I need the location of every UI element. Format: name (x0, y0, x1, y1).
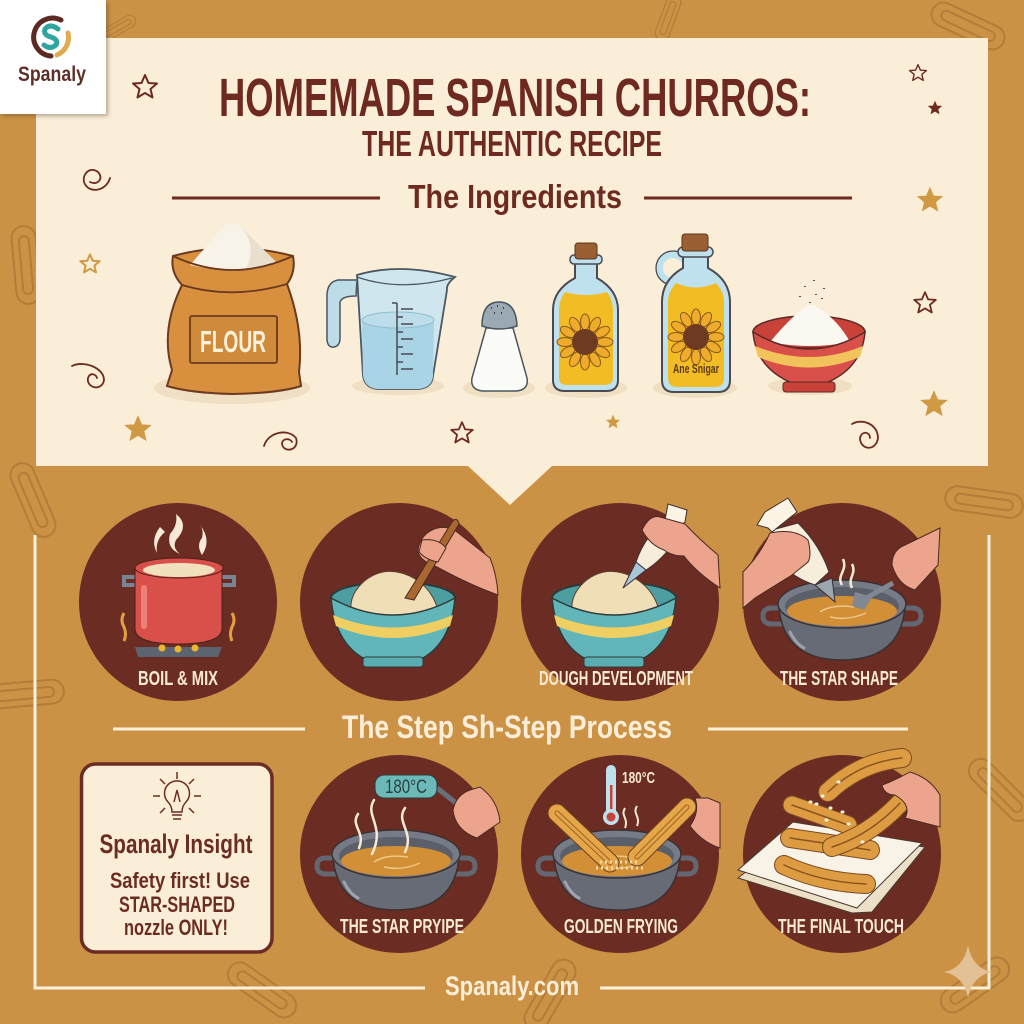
title (219, 68, 811, 164)
icon: salt shaker (463, 302, 535, 398)
label: THE STAR SHAPE (780, 668, 898, 690)
circle: the star pryipe (300, 755, 500, 953)
icon: light bulb (153, 772, 201, 819)
decorative stars and swirls (72, 65, 948, 450)
footer: website: Spanaly.com (445, 971, 579, 1001)
icon: sugar bottle with sunflower: Ane Snigar (673, 361, 719, 376)
heading: the ingredients: The Ingredients (408, 178, 622, 215)
icon: measuring jug (327, 269, 455, 395)
heading: process: The Step Sh-Step Process (342, 709, 672, 745)
spoon overlap fingers (419, 540, 446, 562)
callout: spanaly insight: STAR-SHAPED (119, 892, 235, 917)
callout: spanaly insight (82, 764, 272, 952)
callout: spanaly insight: Spanaly Insight (100, 829, 252, 859)
icon: sugar bottle with sunflower (653, 234, 737, 398)
icon: oil bottle with sunflower (545, 243, 627, 398)
callout: spanaly insight: nozzle ONLY! (124, 915, 228, 940)
frame lines (35, 535, 989, 988)
circle: the star pryipe: 180°C (385, 777, 427, 798)
circle: dough development (521, 503, 720, 701)
icon: flour sack (154, 223, 310, 404)
circle: stir dough (300, 503, 498, 701)
circle: the final touch (738, 755, 941, 953)
label: THE STAR PRYIPE (340, 916, 464, 938)
label: THE FINAL TOUCH (778, 916, 904, 938)
circle: the star shape (743, 498, 941, 701)
callout: spanaly insight: Safety first! Use (110, 868, 250, 893)
circle: boil and mix (79, 503, 277, 701)
icon: flour sack: FLOUR (200, 324, 266, 359)
circle: golden frying: 180°C (622, 770, 655, 787)
icon: logo mark (34, 18, 69, 56)
panel: ingredients (36, 38, 988, 505)
icon: sugar bowl (753, 280, 865, 395)
title: THE AUTHENTIC RECIPE (362, 123, 662, 164)
label: GOLDEN FRYING (564, 916, 678, 938)
decorative sparkle (944, 945, 992, 998)
label: DOUGH DEVELOPMENT (539, 668, 693, 690)
logo (0, 0, 108, 116)
label: BOIL & MIX (138, 668, 218, 690)
circle: golden frying (521, 755, 720, 953)
logo: Spanaly (18, 63, 86, 86)
